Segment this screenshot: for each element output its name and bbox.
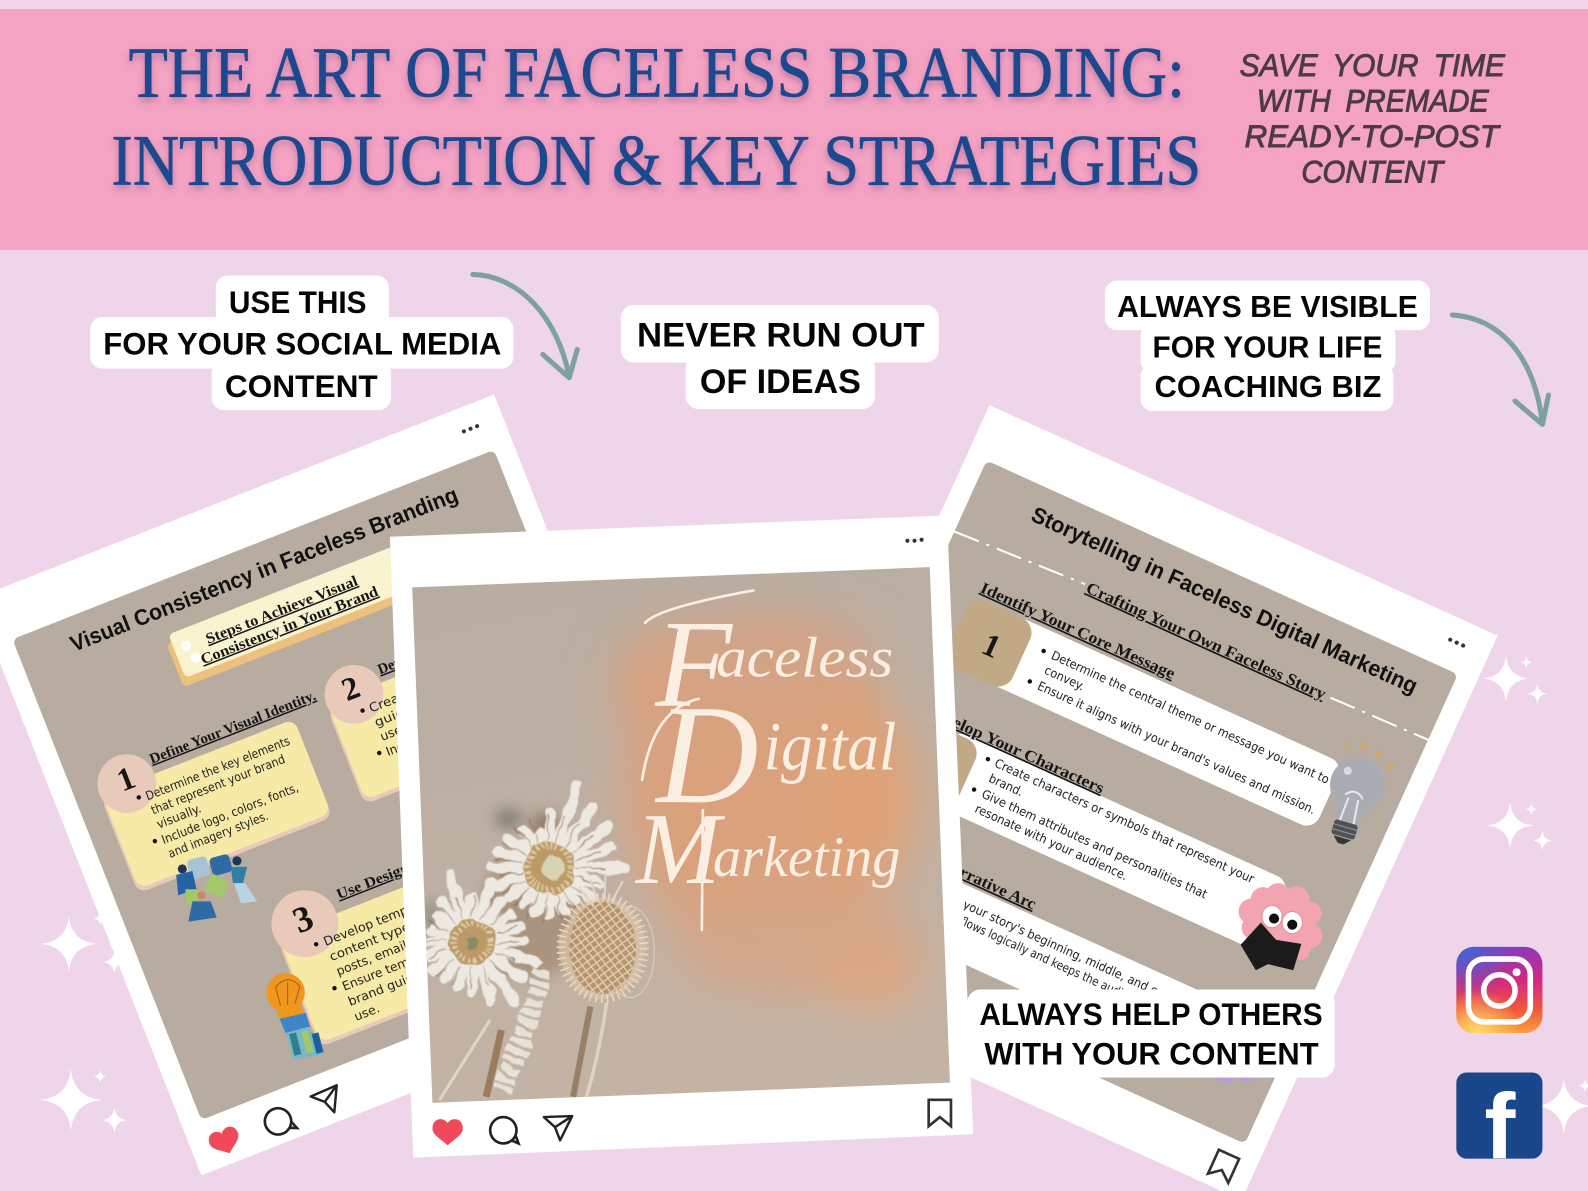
post title: Storytelling in Faceless Digital Marketing xyxy=(1028,502,1422,699)
step 1 xyxy=(89,680,359,893)
callout: never run out of ideas xyxy=(621,305,939,409)
callout: always be visible for your life coaching biz: ALWAYS BE VISIBLE xyxy=(1117,290,1418,324)
tagline: SAVE YOUR TIME xyxy=(1240,48,1506,83)
step 3: Develop a Narrative Arc xyxy=(867,823,1039,913)
callout: always be visible for your life coaching biz xyxy=(1105,281,1430,411)
step 1: visually. xyxy=(155,801,203,832)
step 3: Outline your story's beginning, middle, and end. xyxy=(920,879,1177,1006)
tagline: WITH PREMADE xyxy=(1257,83,1490,118)
tagline xyxy=(1240,48,1506,189)
step 3: Develop templates for xyxy=(322,884,459,949)
step 3: 3 xyxy=(287,897,319,941)
step 3: Ensure it flows logically and keeps the audience engaged. xyxy=(913,894,1196,1032)
panel: right post, storytelling xyxy=(733,405,1498,1191)
step 2: Create comprehensive xyxy=(367,647,513,715)
callout: always be visible for your life coaching biz: COACHING BIZ xyxy=(1155,370,1381,404)
icon: send xyxy=(310,1085,346,1118)
step 1: and imagery styles. xyxy=(166,809,270,861)
sparkles xyxy=(39,655,1588,1134)
menu dots xyxy=(905,538,924,543)
script title: aceless xyxy=(716,627,893,690)
step 1 xyxy=(942,577,1352,831)
callout: use this for your social media content: FOR YOUR SOCIAL MEDIA xyxy=(103,325,501,361)
step 1: 1 xyxy=(976,627,1006,666)
step 1: Identify Your Core Message xyxy=(978,579,1178,683)
step 3: Ensure templates align with xyxy=(340,918,506,994)
step 2 xyxy=(887,699,1297,952)
step 1: Define Your Visual Identity. xyxy=(147,688,318,768)
step 3: brand guidelines for easy xyxy=(346,936,502,1009)
step 2: Create characters or symbols that represent your xyxy=(992,756,1257,886)
subheading box xyxy=(164,545,416,687)
illustration: team with puzzle pieces xyxy=(176,853,257,922)
title: INTRODUCTION & KEY STRATEGIES xyxy=(111,120,1201,200)
arrow: curved down to right side xyxy=(1452,315,1549,424)
icon: comment xyxy=(490,1117,519,1143)
header banner xyxy=(0,9,1588,250)
step 1: Ensure it aligns with your brand's values and mission. xyxy=(1035,679,1318,817)
subheading: Crafting Your Own Faceless Story xyxy=(1083,578,1330,704)
icon: facebook: f xyxy=(1484,1075,1516,1179)
callout: always be visible for your life coaching biz: FOR YOUR LIFE xyxy=(1153,331,1382,365)
icon: brain reading a book xyxy=(1239,883,1323,970)
icon: bookmark xyxy=(929,1100,951,1126)
step 1: Determine the key elements xyxy=(144,734,292,803)
step 2: Develop Brand Guidelines xyxy=(375,604,532,678)
step 1: that represent your brand xyxy=(149,752,287,817)
step 2: Include examples and xyxy=(384,698,512,759)
callout: always help others with your content: WITH YOUR CONTENT xyxy=(984,1035,1319,1071)
illustration: orange lightbulb with team xyxy=(266,973,326,1059)
callout: use this for your social media content xyxy=(90,275,513,410)
script title: arketing xyxy=(713,826,900,889)
flower: thistle xyxy=(560,873,654,999)
post title: Visual Consistency in Faceless Branding xyxy=(67,482,461,657)
image: orange wash and dried flowers xyxy=(423,613,927,1100)
icon: send xyxy=(544,1116,572,1140)
step 3 xyxy=(261,792,604,1048)
step 3: posts, emails, and more. xyxy=(334,910,481,979)
title xyxy=(111,33,1201,200)
step 3: use. xyxy=(352,1001,382,1024)
step 1: convey. xyxy=(1042,663,1087,693)
flower shadows xyxy=(423,808,584,979)
step 2: use. xyxy=(378,721,408,744)
stems xyxy=(440,1003,607,1100)
script title: D xyxy=(654,676,759,833)
step 2: resonate with your audience. xyxy=(973,802,1130,883)
flower: daisy upper xyxy=(491,786,626,914)
subheading box: Steps to Achieve Visual xyxy=(203,573,360,648)
flower: wheat xyxy=(500,970,543,1092)
panel: centre post, Faceless Digital Marketing xyxy=(390,515,973,1158)
callout: always help others with your content: ALWAYS HELP OTHERS xyxy=(979,996,1323,1032)
tagline: CONTENT xyxy=(1301,154,1446,189)
icon: heart xyxy=(206,1124,244,1159)
step 1: Determine the central theme or message you want to xyxy=(1049,648,1331,787)
step 2: guidelines for visual xyxy=(373,665,510,730)
title: THE ART OF FACELESS BRANDING: xyxy=(129,33,1185,113)
flower: daisy lower xyxy=(429,875,536,1002)
callout: never run out of ideas: NEVER RUN OUT xyxy=(637,316,925,354)
callout: always help others with your content xyxy=(967,989,1335,1078)
script title: M xyxy=(634,793,725,905)
callout: never run out of ideas: OF IDEAS xyxy=(700,363,861,401)
script flourishes xyxy=(642,590,753,930)
icon: facebook xyxy=(1456,1073,1542,1179)
panel: left post, visual consistency xyxy=(0,394,721,1175)
script title xyxy=(634,590,900,930)
step 2: Give them attributes and personalities that xyxy=(979,787,1210,901)
callout: use this for your social media content: USE THIS xyxy=(229,284,367,320)
icon: bookmark xyxy=(1208,1150,1239,1183)
subheading box: Consistency in Your Brand xyxy=(198,583,381,668)
step 2: 2 xyxy=(337,669,365,709)
arrow: curved down to left post xyxy=(473,274,577,378)
menu dots xyxy=(461,424,480,434)
script title: igital xyxy=(764,709,896,785)
step 3: Use Design Templates xyxy=(334,833,482,903)
step 2: Develop Your Characters xyxy=(922,701,1107,797)
icon: lightbulb xyxy=(1314,737,1397,852)
step 3: content types like social xyxy=(327,892,483,964)
icon: comment xyxy=(261,1104,297,1138)
icon: instagram xyxy=(1456,947,1542,1033)
icon: heart xyxy=(432,1119,463,1145)
step 2: proper usage. xyxy=(401,717,505,769)
step 2 xyxy=(315,596,573,804)
step 1: Include logo, colors, fonts, xyxy=(160,781,301,847)
step 2: brand. xyxy=(987,771,1026,799)
menu dots xyxy=(1448,637,1466,648)
tagline: READY-TO-POST xyxy=(1245,119,1502,154)
callout: use this for your social media content: CONTENT xyxy=(225,368,378,404)
script title: F xyxy=(654,595,733,734)
hidden purple illustration tip xyxy=(1213,1078,1256,1084)
step 1: 1 xyxy=(112,760,140,799)
step 3 xyxy=(837,823,1242,1073)
